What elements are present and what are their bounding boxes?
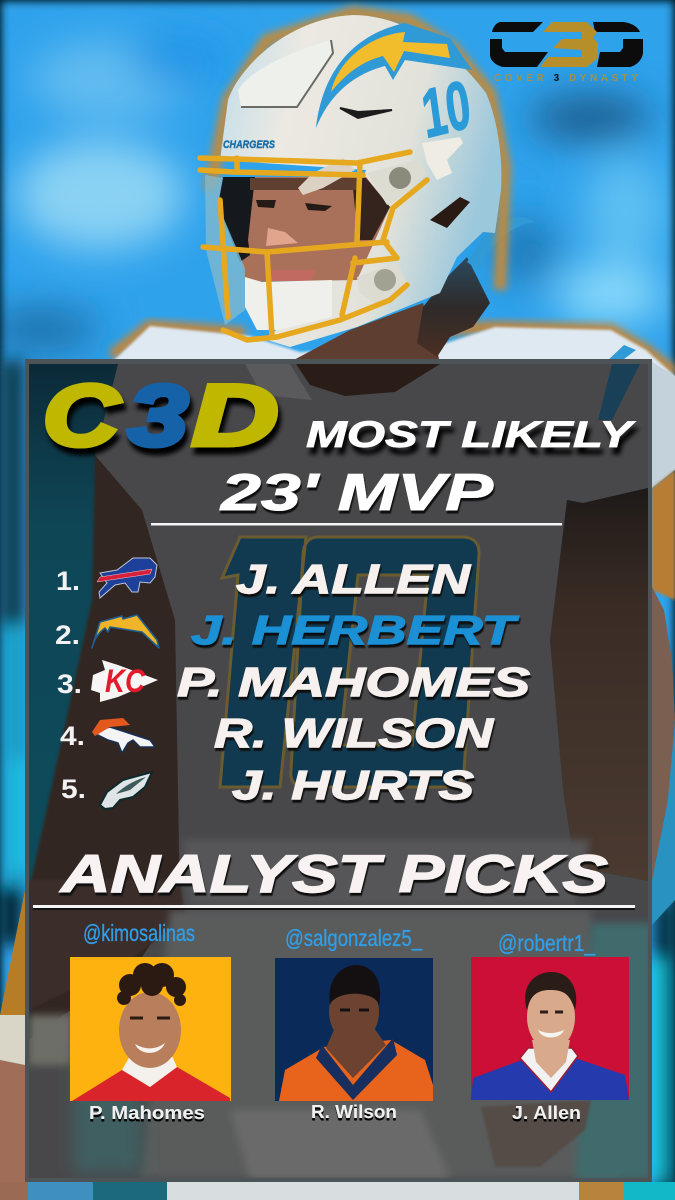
chin strap	[245, 277, 332, 330]
screws	[389, 167, 411, 189]
jersey torso	[29, 364, 648, 1178]
analyst card: robertr1	[471, 930, 629, 1123]
heading: 23' MVP: 23' MVP	[220, 464, 493, 522]
wrap left	[29, 1015, 72, 1065]
arm right	[550, 488, 648, 881]
clip	[422, 137, 463, 180]
jersey number 10 ghost	[220, 537, 479, 787]
icon: broncos logo	[92, 718, 155, 753]
analyst card: kimosalinas: @kimosalinas	[83, 920, 195, 946]
name: P. Mahomes: P. Mahomes	[89, 1103, 205, 1123]
logo letter C	[490, 22, 548, 67]
forehead shadow	[250, 178, 358, 190]
lower left brown	[29, 880, 185, 1010]
arm left	[29, 450, 190, 1040]
icon: chargers logo	[92, 615, 159, 648]
heading: most likely: MOST LIKELY	[306, 414, 636, 455]
icon: chiefs logo	[91, 660, 158, 702]
lightning bolt	[316, 23, 472, 128]
name: R. Wilson: R. WILSON	[214, 710, 495, 756]
chargers wordmark: CHARGERS	[223, 139, 276, 151]
bottom strip below the panel	[0, 1182, 675, 1200]
title: C3D wordmark	[43, 368, 278, 464]
hair	[417, 257, 490, 357]
hip lighter	[183, 840, 590, 905]
name: J. Allen: J. Allen	[512, 1103, 581, 1123]
orange glow around player	[112, 326, 675, 373]
analyst card: robertr1: @robertr1_	[498, 930, 596, 956]
photo: R. Wilson	[275, 958, 433, 1101]
teal lower right	[575, 923, 652, 1180]
visor clear shield	[205, 175, 245, 325]
name: P. Mahomes: P. MAHOMES	[177, 659, 530, 705]
face	[227, 177, 390, 282]
logo letter 3	[540, 22, 598, 67]
icon: eagles logo	[100, 772, 152, 809]
photo: J. Allen	[471, 957, 629, 1100]
title: C3D wordmark: C	[43, 368, 121, 464]
hand	[481, 1100, 591, 1167]
number 10 on helmet: 10	[418, 66, 475, 153]
helmet top panel	[238, 40, 333, 107]
rank row 4	[60, 710, 495, 756]
arm left lower	[0, 1060, 25, 1200]
helmet glow	[210, 12, 505, 290]
divider under heading	[151, 523, 562, 526]
rank row 5: 5.	[61, 774, 86, 804]
photo: P. Mahomes	[70, 957, 231, 1101]
logo letter D	[593, 22, 643, 67]
analyst card: salgonzalez5: @salgonzalez5_	[285, 925, 423, 951]
neck dark	[296, 364, 440, 396]
eyes and brows	[256, 200, 332, 211]
helmet shell	[220, 15, 501, 347]
rank row 1	[56, 556, 472, 602]
title: C3D wordmark: 3	[128, 368, 188, 464]
sleeve stripes	[598, 364, 640, 420]
icon: bills logo	[97, 558, 157, 598]
rank row 2: 2.	[55, 620, 80, 650]
logo: Cover 3 Dynasty	[490, 22, 643, 84]
rank row 3	[57, 659, 530, 705]
analyst card: salgonzalez5	[275, 925, 433, 1122]
ear vent	[430, 197, 470, 228]
helmet side plates	[357, 160, 427, 305]
shoulders	[112, 326, 675, 430]
name: J. Herbert: J. HERBERT	[191, 607, 519, 653]
name: J. Allen: J. ALLEN	[236, 556, 472, 602]
rank row 3: 3.	[57, 669, 82, 699]
mouth	[268, 270, 316, 281]
divider under analyst picks	[33, 905, 635, 908]
name: J. Hurts: J. HURTS	[232, 762, 474, 808]
ranking list	[55, 556, 530, 809]
analyst card: kimosalinas	[70, 920, 231, 1123]
teal lower left	[73, 1057, 142, 1173]
heading: analyst picks: ANALYST PICKS	[58, 845, 608, 904]
neck	[290, 303, 440, 362]
arm right	[652, 587, 675, 880]
jersey collar stripe	[245, 364, 312, 400]
yellow facemask	[200, 152, 427, 340]
helmet vent	[340, 108, 392, 118]
rank row 4: 4.	[60, 721, 85, 751]
name: R. Wilson: R. Wilson	[311, 1102, 397, 1122]
panel: dark translucent card	[25, 359, 652, 1182]
icon: chiefs logo: KC	[105, 663, 146, 699]
orange edge right	[652, 470, 675, 600]
rank row 2	[55, 607, 519, 653]
logo tagline: COVER 3 DYNASTY	[494, 73, 638, 84]
title: C3D wordmark: D	[192, 368, 278, 464]
sleeve right	[652, 362, 675, 488]
nose highlight	[266, 228, 298, 246]
helmet	[200, 12, 505, 347]
rank row 5	[61, 762, 474, 809]
rank row 1: 1.	[56, 566, 80, 596]
dark interior of helmet	[218, 177, 255, 262]
mouthguard	[298, 158, 355, 195]
